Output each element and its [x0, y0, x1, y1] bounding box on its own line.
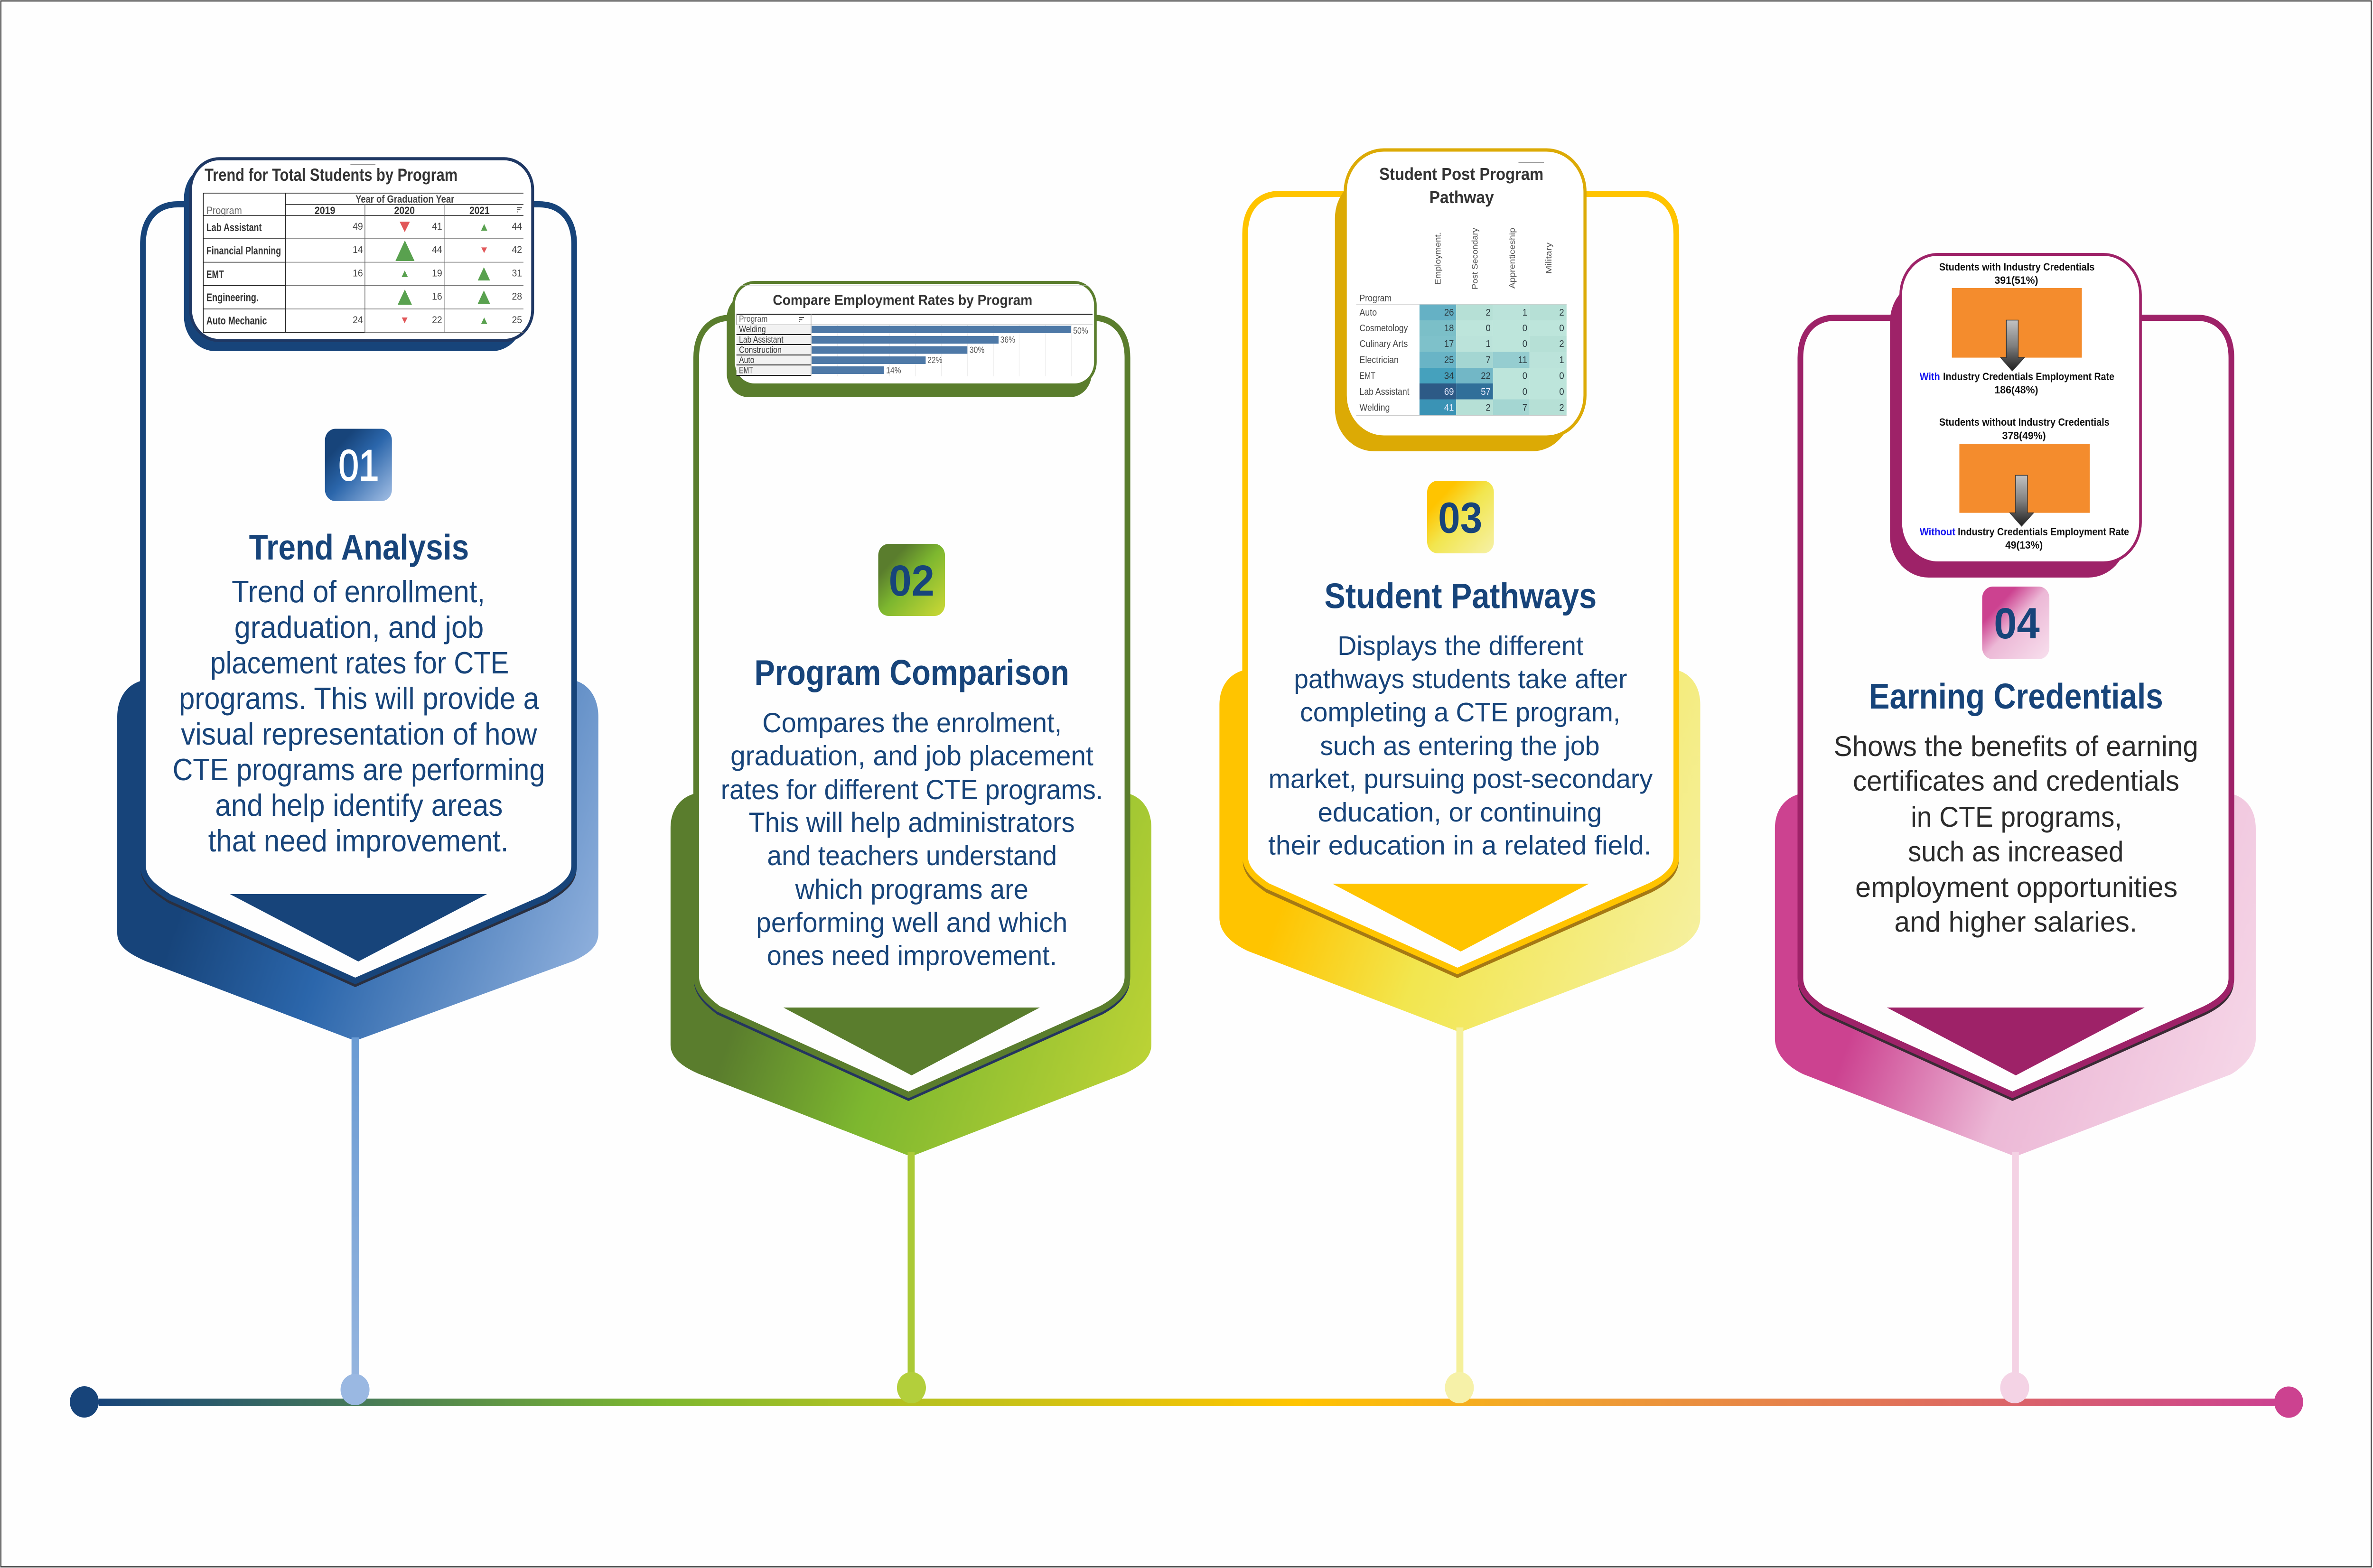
description text: graduation, and job placement — [730, 740, 1093, 771]
heading: Program Comparison — [755, 653, 1069, 693]
description text: visual representation of how — [181, 717, 537, 752]
description text: and help identify areas — [215, 788, 503, 823]
chart: student post program pathway heatmap: 1 — [1523, 308, 1527, 318]
chart: trend for total students table: Program — [206, 205, 242, 216]
chart: trend for total students table: 31 — [512, 268, 522, 279]
chart: industry credentials funnel: 49(13%) — [2005, 540, 2043, 551]
chart: student post program pathway heatmap: 2 — [1559, 339, 1564, 349]
chart: industry credentials funnel: Students with Industry Credentials — [1939, 261, 2094, 273]
card interior — [699, 321, 1125, 1092]
chart: trend for total students table: Financial Planning — [206, 244, 281, 257]
chart: compare employment rates bar chart: Construction — [739, 345, 782, 355]
chart: compare employment rates bar chart — [734, 282, 1095, 385]
chart: student post program pathway heatmap: Cosmetology — [1360, 323, 1408, 334]
chart: student post program pathway heatmap: 0 — [1523, 371, 1527, 382]
description text: their education in a related field. — [1268, 830, 1651, 860]
chart: trend for total students table: Auto Mechanic — [206, 315, 267, 327]
chart: trend for total students table: Year of Graduation Year — [355, 194, 454, 205]
description text: education, or continuing — [1318, 797, 1602, 827]
chart: student post program pathway heatmap: 0 — [1486, 323, 1491, 334]
thumbnail backing — [184, 164, 523, 351]
chart: trend for total students table: 41 — [432, 221, 442, 232]
chart: student post program pathway heatmap: Military — [1544, 242, 1553, 274]
chart: student post program pathway heatmap: Apprenticeship — [1507, 228, 1517, 289]
panel: earning credentials — [1775, 254, 2256, 1403]
chart: trend for total students table: 16 — [353, 268, 363, 279]
back chevron shape — [1219, 671, 1700, 1031]
chart: trend for total students table: 22 — [432, 315, 442, 326]
description text: programs. This will provide a — [179, 681, 539, 716]
number badge 04 — [1982, 587, 2049, 659]
chart: student post program pathway heatmap: 25 — [1444, 355, 1454, 365]
description text: such as increased — [1908, 836, 2123, 868]
card outline — [146, 207, 571, 978]
panel: student pathways — [1219, 150, 1700, 1403]
chart: compare employment rates bar chart: 14% — [886, 365, 901, 375]
chart: student post program pathway heatmap: 0 — [1523, 339, 1527, 349]
chart: compare employment rates bar chart: Program — [739, 314, 767, 324]
chart: trend for total students table: 24 — [353, 315, 363, 326]
number badge 02: 02 — [889, 556, 934, 605]
description text: which programs are — [795, 874, 1028, 905]
connector stem — [352, 1037, 359, 1379]
chart: student post program pathway heatmap: 7 — [1523, 403, 1527, 413]
back chevron shape — [671, 794, 1151, 1155]
description text: in CTE programs, — [1911, 802, 2122, 833]
description text: Trend of enrollment, — [232, 575, 485, 609]
card interior — [1248, 197, 1673, 968]
chart: trend for total students table: Engineering. — [206, 291, 259, 304]
number badge 01: 01 — [338, 441, 379, 490]
chart: industry credentials funnel: Industry Credentials Employment Rate — [1943, 371, 2114, 383]
chart title: Trend for Total Students by Program — [205, 165, 458, 185]
chart: student post program pathway heatmap: 0 — [1559, 323, 1564, 334]
chart: student post program pathway heatmap: Pathway — [1429, 188, 1494, 207]
chart: compare employment rates bar chart: 36% — [1000, 335, 1015, 345]
chart: student post program pathway heatmap: 34 — [1444, 371, 1454, 382]
chart: student post program pathway heatmap: 41 — [1444, 403, 1454, 413]
connector stem — [1457, 1027, 1463, 1376]
back chevron shape — [1775, 794, 2256, 1155]
connector dot — [2000, 1372, 2029, 1403]
card outline — [1248, 197, 1673, 968]
arrow: with credentials — [2000, 320, 2024, 371]
chart: student post program pathway heatmap: 1 — [1486, 339, 1491, 349]
connector dot — [1445, 1372, 1474, 1403]
number badge 02 — [878, 544, 945, 616]
timeline start dot — [70, 1386, 99, 1418]
card shadow — [146, 211, 571, 981]
heading: Earning Credentials — [1869, 677, 2163, 717]
number badge 01 — [325, 429, 392, 501]
chart: student post program pathway heatmap: 2 — [1559, 403, 1564, 413]
chart: compare employment rates bar chart: Lab Assistant — [739, 334, 784, 345]
panel: trend analysis — [117, 159, 598, 1405]
description text: This will help administrators — [749, 807, 1075, 838]
chart: trend for total students table: 14 — [353, 244, 363, 255]
description text: and teachers understand — [767, 840, 1057, 871]
chart: student post program pathway heatmap: 7 — [1486, 355, 1491, 365]
chart: student post program pathway heatmap: 0 — [1523, 323, 1527, 334]
chart: trend for total students table: 25 — [512, 315, 522, 326]
chart: student post program pathway heatmap: 17 — [1444, 339, 1454, 349]
description text — [1834, 731, 2198, 938]
chart: student post program pathway heatmap: 2 — [1486, 308, 1491, 318]
chart: trend for total students table: Lab Assistant — [206, 221, 262, 233]
chart: student post program pathway heatmap: Electrician — [1360, 355, 1399, 365]
card shadow — [1803, 324, 2229, 1095]
chart: industry credentials funnel: 391(51%) — [1994, 275, 2038, 286]
pointer triangle — [1332, 884, 1589, 952]
chart: industry credentials funnel: Without — [1920, 526, 1955, 538]
chart: compare employment rates bar chart: 30% — [970, 345, 984, 355]
chart: compare employment rates bar chart: 50% — [1073, 326, 1088, 336]
chart: student post program pathway heatmap: 69 — [1444, 387, 1454, 397]
description text — [1268, 630, 1653, 860]
chart: student post program pathway heatmap: 18 — [1444, 323, 1454, 334]
chart: industry credentials funnel — [1901, 254, 2140, 563]
connector dot — [897, 1372, 926, 1403]
chart: compare employment rates bar chart: Auto — [739, 355, 755, 365]
chart: student post program pathway heatmap: Employment. — [1433, 232, 1442, 285]
chart title: Compare Employment Rates by Program — [773, 292, 1032, 308]
chart: student post program pathway heatmap: 0 — [1523, 387, 1527, 397]
chart: compare employment rates bar chart: EMT — [739, 365, 753, 375]
description text: certificates and credentials — [1853, 765, 2179, 797]
chart: student post program pathway heatmap: EMT — [1360, 371, 1375, 382]
connector stem — [907, 1152, 915, 1378]
description text: Compares the enrolment, — [762, 707, 1062, 738]
connector stem — [2012, 1152, 2019, 1378]
chart: trend for total students table: EMT — [206, 268, 224, 280]
card shadow — [699, 324, 1125, 1095]
card outline — [1803, 321, 2229, 1092]
chart: trend for total students table: 19 — [432, 268, 442, 279]
chart: trend for total students table: 2020 — [394, 205, 415, 216]
chart: student post program pathway heatmap: 2 — [1486, 403, 1491, 413]
chart: student post program pathway heatmap: 22 — [1481, 371, 1491, 382]
chart: industry credentials funnel: With — [1920, 371, 1940, 383]
card outline — [699, 321, 1125, 1092]
description text: and higher salaries. — [1894, 906, 2137, 938]
thumbnail backing — [1890, 280, 2127, 578]
chart: student post program pathway heatmap: 11 — [1518, 355, 1527, 365]
chart: industry credentials funnel: Industry Credentials Employment Rate — [1958, 526, 2129, 538]
thumbnail backing — [1335, 176, 1571, 451]
chart: student post program pathway heatmap: Welding — [1360, 403, 1390, 413]
description text: employment opportunities — [1855, 872, 2177, 903]
chart: student post program pathway heatmap: Post Secondary — [1470, 227, 1479, 289]
heading: Trend Analysis — [249, 528, 469, 568]
chart: compare employment rates bar chart: 22% — [927, 355, 943, 365]
timeline end dot — [2274, 1387, 2303, 1418]
description text: ones need improvement. — [767, 940, 1057, 971]
pointer triangle — [1887, 1008, 2145, 1075]
chart: student post program pathway heatmap: Program — [1360, 293, 1392, 304]
description text: Displays the different — [1337, 630, 1583, 661]
description text: rates for different CTE programs. — [721, 774, 1103, 805]
panel: program comparison — [671, 282, 1151, 1403]
chart: student post program pathway heatmap: 2 — [1559, 308, 1564, 318]
pointer triangle — [230, 894, 487, 961]
heading: Student Pathways — [1325, 577, 1597, 616]
description text: market, pursuing post-secondary — [1269, 764, 1653, 794]
chart title: Student Post Program — [1379, 165, 1543, 184]
description text: completing a CTE program, — [1300, 697, 1620, 727]
chart: student post program pathway heatmap: 26 — [1444, 308, 1454, 318]
chart: student post program pathway heatmap: Culinary Arts — [1360, 339, 1408, 349]
chart: student post program pathway heatmap — [1345, 150, 1585, 437]
description text: that need improvement. — [208, 824, 508, 859]
description text — [173, 575, 545, 859]
chart: trend for total students table: 42 — [512, 244, 522, 255]
chart: trend for total students table: 44 — [432, 244, 442, 255]
description text: performing well and which — [756, 907, 1067, 938]
chart: trend for total students table: 44 — [512, 221, 522, 232]
chart: trend for total students table: 49 — [353, 221, 363, 232]
description text: graduation, and job — [234, 610, 484, 645]
description text — [721, 707, 1103, 971]
chart: student post program pathway heatmap: Lab Assistant — [1360, 387, 1410, 397]
chart: student post program pathway heatmap: 57 — [1481, 387, 1491, 397]
pointer triangle — [784, 1008, 1040, 1075]
number badge 04: 04 — [1994, 599, 2040, 648]
description text: such as entering the job — [1320, 730, 1600, 761]
chart: student post program pathway heatmap: Auto — [1360, 308, 1377, 318]
chart: trend for total students table — [191, 159, 533, 341]
card shadow — [1248, 201, 1673, 972]
chart: industry credentials funnel: 378(49%) — [2002, 430, 2046, 442]
chart: industry credentials funnel: Students without Industry Credentials — [1939, 417, 2110, 428]
description text: CTE programs are performing — [173, 753, 545, 787]
chart: student post program pathway heatmap: 1 — [1559, 355, 1564, 365]
card interior — [146, 207, 571, 978]
chart: trend for total students table: 2019 — [315, 205, 335, 216]
number badge 03: 03 — [1438, 493, 1482, 542]
chart: trend for total students table: 28 — [512, 291, 522, 302]
chart: trend for total students table: 2021 — [469, 205, 490, 216]
chart: industry credentials funnel: 186(48%) — [1994, 384, 2038, 396]
orange block without credentials — [1959, 444, 2090, 513]
connector dot — [341, 1374, 370, 1405]
chart: trend for total students table: 16 — [432, 291, 442, 302]
arrow: without credentials — [2010, 476, 2034, 526]
thumbnail backing — [727, 294, 1092, 397]
card interior — [1803, 321, 2229, 1092]
description text: Shows the benefits of earning — [1834, 731, 2198, 762]
chart: student post program pathway heatmap: 0 — [1559, 371, 1564, 382]
timeline bar — [70, 1386, 2303, 1418]
back chevron shape — [117, 681, 598, 1039]
description text: placement rates for CTE — [210, 646, 509, 681]
chart: student post program pathway heatmap: 0 — [1559, 387, 1564, 397]
chart: compare employment rates bar chart: Welding — [739, 324, 766, 334]
number badge 03 — [1427, 481, 1494, 553]
orange block with credentials — [1952, 288, 2082, 358]
description text: pathways students take after — [1294, 663, 1627, 694]
